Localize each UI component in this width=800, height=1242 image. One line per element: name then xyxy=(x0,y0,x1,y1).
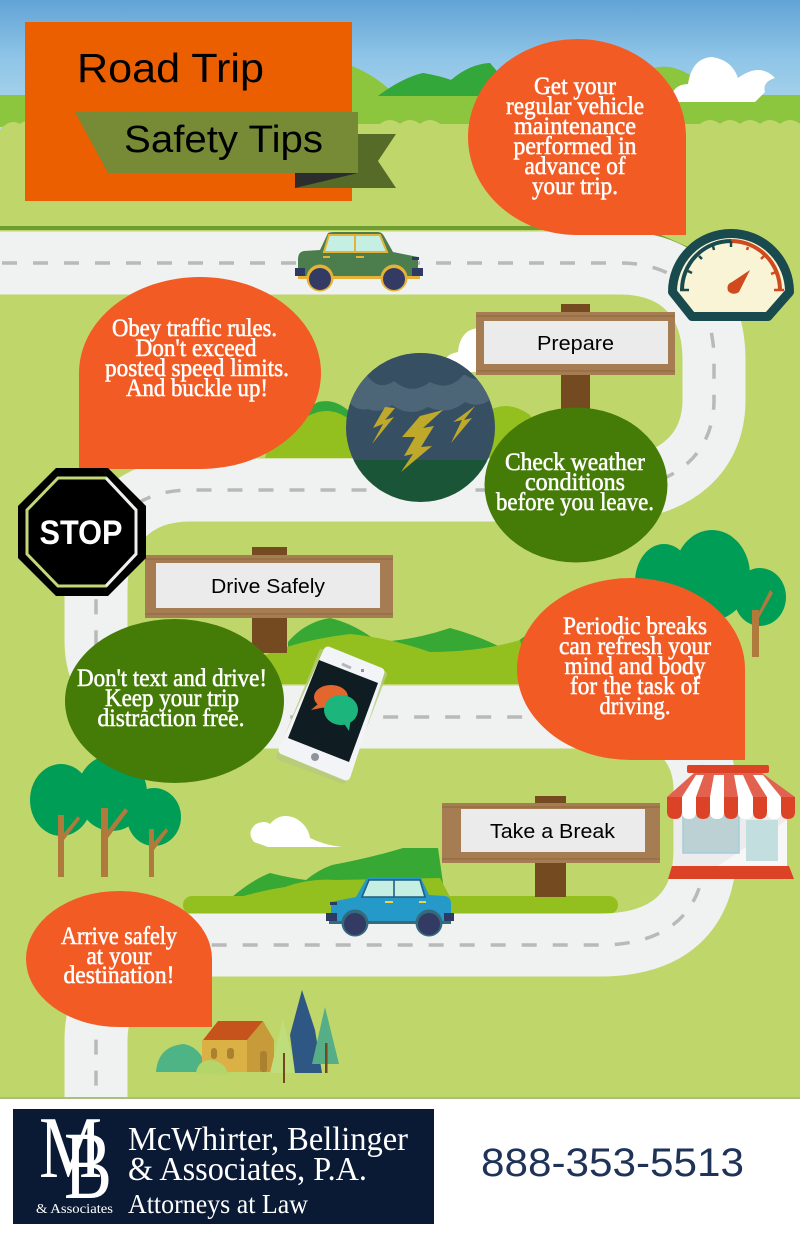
mid hills drive safely xyxy=(265,618,540,684)
bubble: don't text: distraction free. xyxy=(98,705,244,732)
bubble: vehicle maintenance: performed in xyxy=(514,133,637,160)
icon: stop sign: STOP xyxy=(40,514,122,552)
bubble: periodic breaks: for the task of xyxy=(570,673,701,700)
bubble: vehicle maintenance xyxy=(468,39,686,235)
cloud lower xyxy=(250,816,342,847)
sky background xyxy=(0,0,800,130)
cloud top right xyxy=(672,57,775,102)
trees right xyxy=(635,530,786,657)
mid hills behind storm xyxy=(265,401,550,458)
bubble: don't text: Keep your trip xyxy=(105,685,239,712)
icon: smartphone xyxy=(279,651,384,781)
bubble: periodic breaks xyxy=(517,578,745,760)
icon: store xyxy=(667,765,795,879)
bubble: periodic breaks: driving. xyxy=(600,693,670,720)
bubble: check weather: before you leave. xyxy=(496,489,654,516)
bubble: vehicle maintenance: regular vehicle xyxy=(506,93,644,120)
road edge shadow xyxy=(0,228,690,250)
ribbon fold xyxy=(295,173,358,188)
bubble: periodic breaks: mind and body xyxy=(564,653,706,680)
bubble: don't text: Don't text and drive! xyxy=(77,665,267,692)
firm name: Attorneys at Law xyxy=(128,1189,308,1219)
trees left xyxy=(30,755,181,877)
bubble: vehicle maintenance: maintenance xyxy=(514,113,636,140)
firm name: & Associates, P.A. xyxy=(128,1151,367,1188)
bubble: check weather: conditions xyxy=(525,469,625,496)
bubble: arrive safely xyxy=(26,891,212,1027)
distant hills xyxy=(0,62,800,127)
bubble: traffic rules: posted speed limits. xyxy=(105,355,289,382)
icon: green car xyxy=(295,232,423,292)
logo monogram: & Associates xyxy=(36,1202,113,1217)
winding road xyxy=(0,263,714,1100)
ribbon tail xyxy=(295,134,396,188)
sign: prepare xyxy=(476,304,675,414)
bubble: check weather: Check weather xyxy=(505,449,646,476)
logo monogram: B xyxy=(64,1112,112,1219)
bubble: periodic breaks: can refresh your xyxy=(559,633,712,660)
bubble: vehicle maintenance: advance of xyxy=(524,153,626,180)
firm name xyxy=(128,1121,409,1219)
sign: take a break: Take a Break xyxy=(490,821,616,843)
bubble: vehicle maintenance: your trip. xyxy=(532,173,618,200)
lower hills xyxy=(183,848,618,914)
sign: drive safely xyxy=(145,547,393,653)
logo monogram: M xyxy=(39,1100,102,1197)
ribbon xyxy=(75,112,358,173)
bubble: periodic breaks: Periodic breaks xyxy=(563,613,707,640)
phone number: 888-353-5513 xyxy=(481,1141,744,1185)
bubble: arrive safely: destination! xyxy=(64,962,174,989)
grass ground xyxy=(0,120,800,1098)
bubble: check weather xyxy=(484,408,668,562)
logo panel xyxy=(13,1100,434,1224)
icon: speedometer xyxy=(672,234,790,316)
icon: blue car xyxy=(326,877,454,936)
cloud behind prepare sign xyxy=(444,328,500,372)
bubble: arrive safely: at your xyxy=(86,943,152,970)
sign: prepare: Prepare xyxy=(537,333,614,355)
ground bottom edge xyxy=(0,1097,800,1099)
icon: village xyxy=(156,990,339,1083)
firm name: McWhirter, Bellinger xyxy=(128,1121,409,1158)
bubble: traffic rules: Obey traffic rules. xyxy=(112,315,277,342)
sign: drive safely: Drive Safely xyxy=(211,576,325,598)
title: road trip: Road Trip xyxy=(77,45,264,91)
sign: take a break xyxy=(442,796,660,897)
title: safety tips: Safety Tips xyxy=(124,119,323,161)
title panel xyxy=(25,22,396,201)
bubble: traffic rules: Don't exceed xyxy=(136,335,257,362)
bubble: arrive safely: Arrive safely xyxy=(61,923,177,950)
bubble: traffic rules: And buckle up! xyxy=(126,375,268,402)
icon: stop sign xyxy=(18,468,146,596)
bubble: traffic rules xyxy=(79,277,321,469)
icon: storm xyxy=(346,353,495,502)
footer background xyxy=(0,1099,800,1242)
bubble: vehicle maintenance: Get your xyxy=(534,73,617,100)
bubble: don't text xyxy=(65,619,284,783)
